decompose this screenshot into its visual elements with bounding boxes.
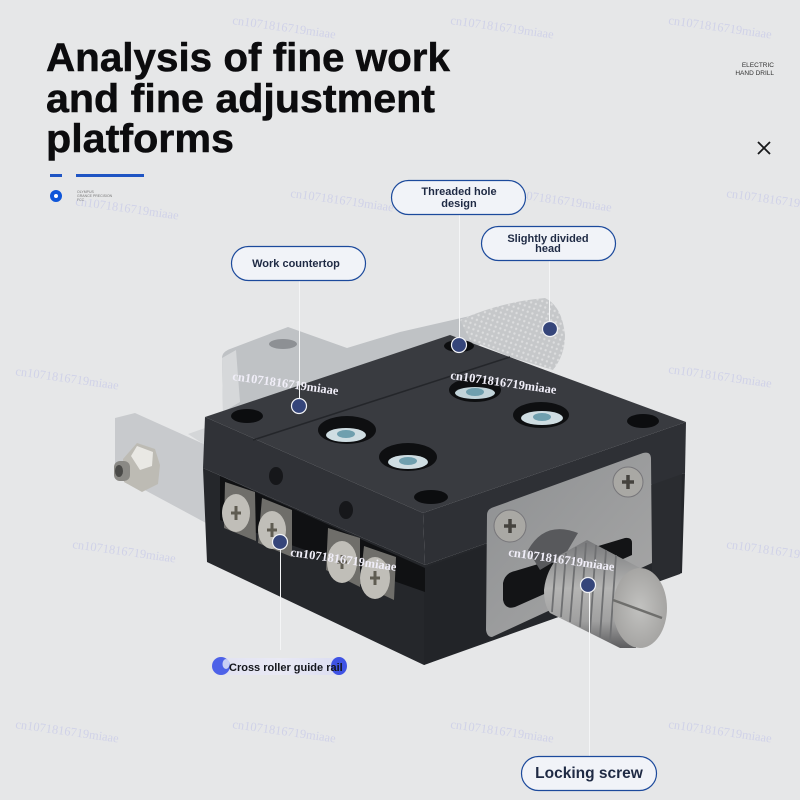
side bracket arm — [188, 428, 205, 445]
icon: blue target with small caption: OLYMPUS — [77, 190, 95, 194]
leader lines — [280, 215, 590, 756]
counterbored socket screws — [318, 378, 569, 471]
top right caption: HAND DRILL — [735, 70, 774, 77]
knurled micrometer knob — [460, 298, 565, 370]
watermarks: cn1071816719miaae — [668, 717, 773, 746]
watermarks: cn1071816719miaae — [15, 364, 120, 393]
watermarks: cn1071816719miaae — [450, 717, 555, 746]
watermarks: cn1071816719miaae — [232, 717, 337, 746]
icon: blue target with small caption: FCC — [77, 198, 85, 202]
callout: threaded hole design: design — [441, 198, 477, 210]
watermarks: cn1071816719miaae — [508, 186, 613, 215]
icon: blue target with small caption — [52, 190, 113, 202]
callout markers — [272, 322, 596, 592]
callout: threaded hole design: Threaded hole — [421, 186, 497, 198]
title — [46, 36, 451, 161]
watermarks: cn1071816719miaae — [72, 537, 177, 566]
title: and fine adjustment — [46, 77, 435, 121]
watermarks: cn1071816719miaae — [668, 362, 773, 391]
callout: cross roller guide rail — [212, 657, 347, 675]
product photo: positioning platform — [114, 298, 686, 665]
callout: slightly divided head: head — [535, 243, 561, 255]
top right caption: ELECTRIC — [742, 62, 774, 69]
white watermark on product: cn1071816719miaae — [232, 369, 340, 398]
title: Analysis of fine work — [46, 36, 451, 80]
washers and cross screws on rail — [222, 482, 396, 600]
callout: locking screw — [522, 756, 656, 790]
corner holes — [231, 340, 659, 504]
title: platforms — [46, 117, 234, 161]
upper plate top face — [205, 335, 686, 513]
upper plate side faces — [203, 417, 686, 565]
knurled locking knob — [528, 529, 667, 648]
lower block — [203, 468, 685, 665]
accent bars — [50, 174, 144, 177]
watermarks: cn1071816719miaae — [668, 13, 773, 42]
white watermark on product: cn1071816719miaae — [450, 368, 558, 397]
callout: threaded hole design — [392, 180, 526, 214]
watermarks: cn1071816719miaae — [232, 13, 337, 42]
callout: slightly divided head — [482, 226, 616, 260]
callout: work countertop — [232, 246, 366, 280]
icon: blue target with small caption: GRANCE PRECISION — [77, 194, 113, 198]
watermarks: cn1071816719miaae — [450, 13, 555, 42]
callout: work countertop: Work countertop — [252, 258, 340, 270]
callout: cross roller guide rail: Cross roller guide rail — [229, 662, 343, 674]
hex nut and set screw — [114, 443, 160, 492]
white watermark on product: cn1071816719miaae — [290, 545, 398, 574]
watermarks: cn1071816719miaae — [75, 194, 180, 223]
white watermark on product: cn1071816719miaae — [508, 545, 616, 574]
rear bracket and micrometer barrel — [222, 316, 480, 412]
watermarks: cn1071816719miaae — [290, 186, 395, 215]
callout: locking screw: Locking screw — [535, 765, 644, 782]
icon: close cross — [758, 142, 770, 154]
front bracket — [115, 413, 206, 523]
watermarks: cn1071816719miaae — [15, 717, 120, 746]
callout: slightly divided head: Slightly divided — [507, 233, 589, 245]
steel lock plate — [486, 453, 652, 637]
white watermark on product — [232, 368, 616, 574]
side threaded holes — [269, 467, 353, 519]
top plate seam — [253, 357, 510, 440]
top right caption — [735, 62, 774, 77]
